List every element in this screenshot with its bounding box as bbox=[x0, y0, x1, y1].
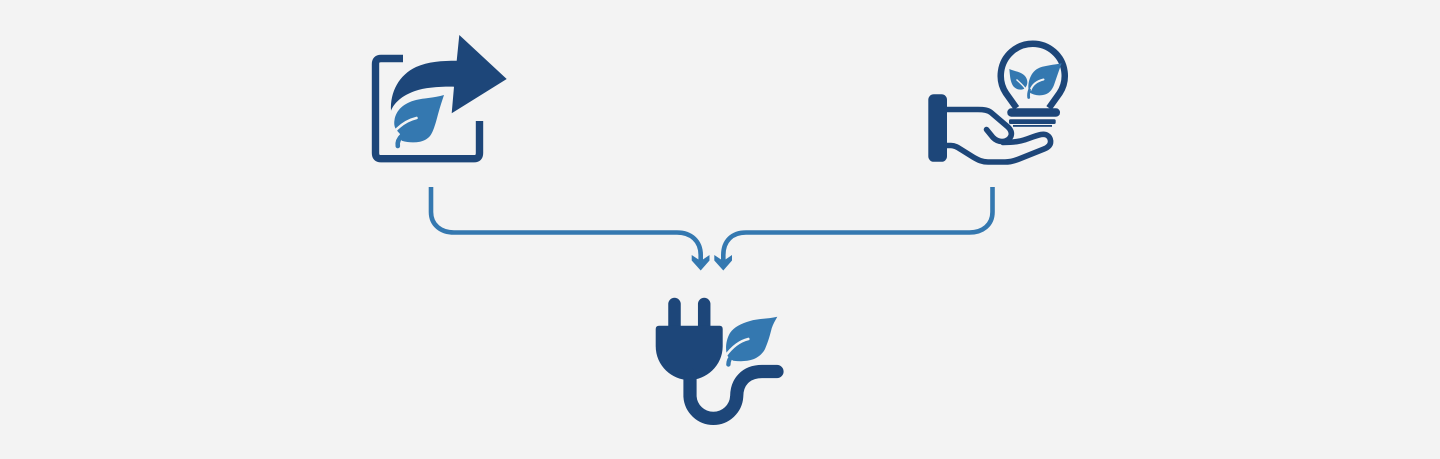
bulb leaves bbox=[1009, 63, 1062, 98]
hand cuff bbox=[928, 94, 947, 162]
icon: plug with leaf bbox=[656, 304, 777, 418]
arrow: right branch bbox=[714, 187, 992, 270]
plug leaf bbox=[726, 317, 777, 361]
icon: hand holding eco light bulb bbox=[928, 44, 1065, 162]
arrow: left branch bbox=[431, 187, 710, 270]
bulb base bbox=[1007, 108, 1060, 127]
plug body bbox=[656, 326, 723, 380]
icon: share arrow with leaf bbox=[376, 35, 507, 159]
hand outline bbox=[946, 110, 1011, 142]
bulb outline bbox=[1001, 44, 1065, 108]
plug cord bbox=[690, 372, 777, 418]
plug prongs bbox=[674, 304, 704, 330]
